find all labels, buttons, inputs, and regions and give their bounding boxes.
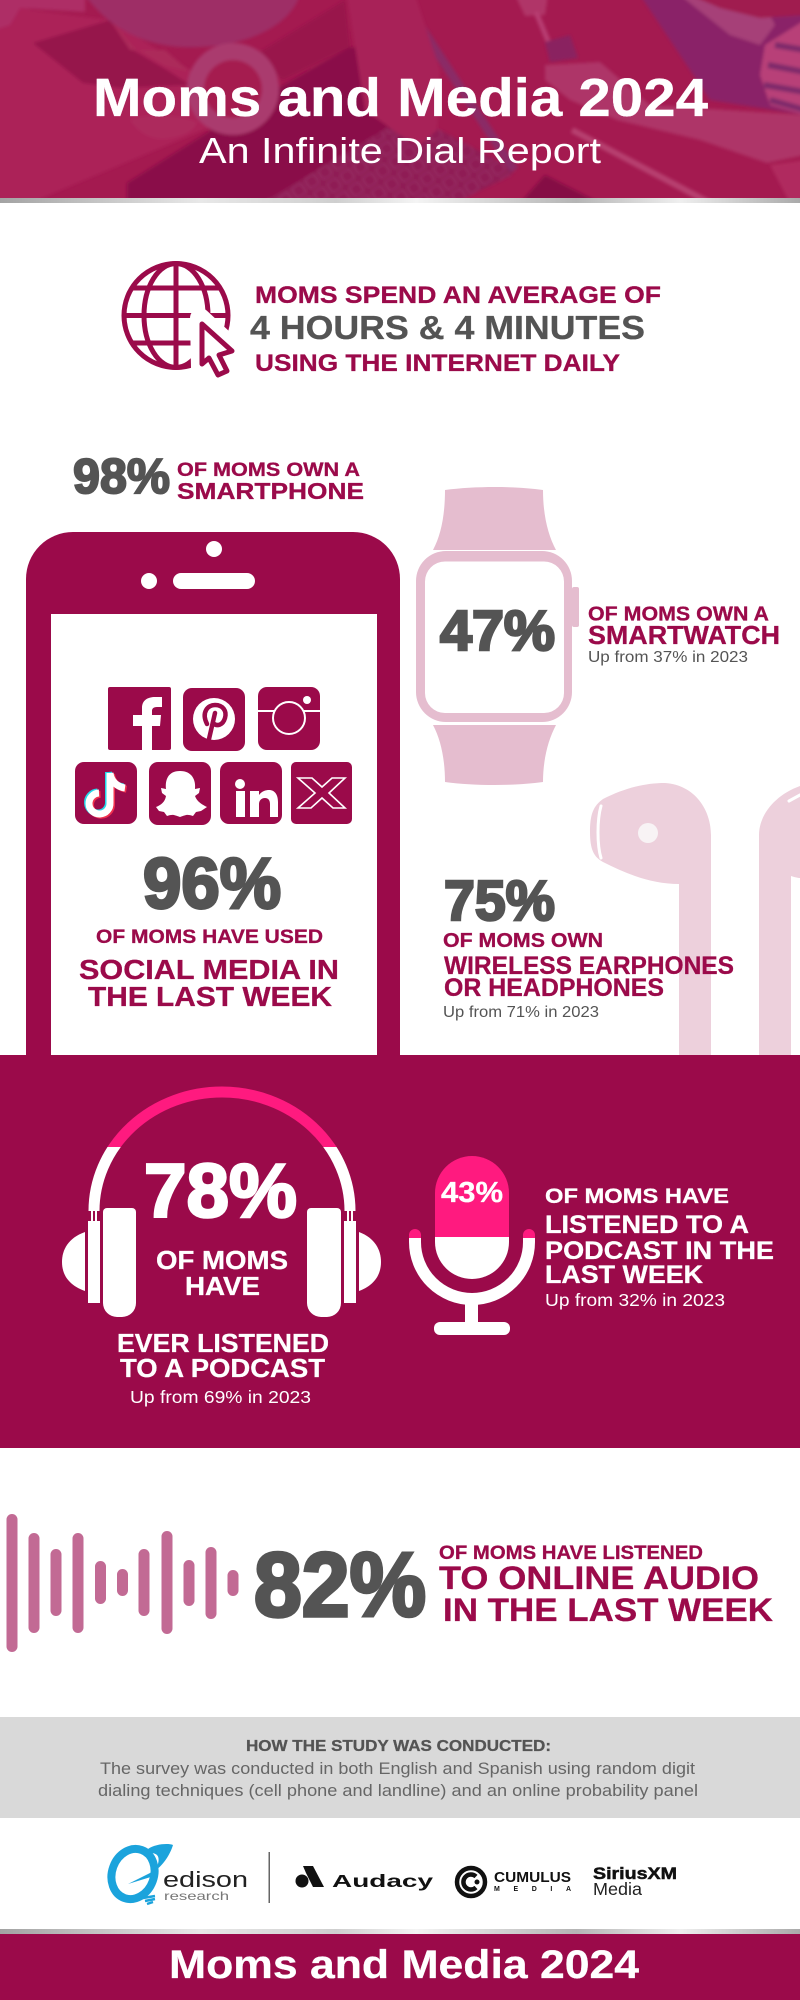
text: online audio stat xyxy=(254,1535,773,1636)
text: internet use stat xyxy=(250,282,661,377)
icon: audio waveform xyxy=(6,1514,238,1652)
header silver divider xyxy=(0,198,800,203)
text: earphones stat: 75% xyxy=(444,869,555,933)
text: online audio stat: TO ONLINE AUDIO xyxy=(439,1560,759,1596)
text: social media stat: THE LAST WEEK xyxy=(88,981,332,1012)
panel: methodology: The survey was conducted in both English and Spanish using random digit xyxy=(100,1760,695,1778)
text: last week podcast stat: LISTENED TO A xyxy=(545,1211,749,1239)
text: social media stat xyxy=(79,845,339,1012)
divider xyxy=(268,1852,270,1903)
text: smartphone stat: 98% xyxy=(73,450,170,504)
text: ever listened to a podcast stat: HAVE xyxy=(185,1271,260,1301)
text: social media stat: 96% xyxy=(143,845,281,924)
panel: footer band xyxy=(0,1934,800,2000)
icon: globe with cursor xyxy=(124,263,238,378)
logo: edison research: research xyxy=(164,1889,229,1903)
panel: methodology: dialing techniques (cell phone and landline) and an online probability panel xyxy=(98,1782,698,1800)
icon: pinterest xyxy=(183,688,245,751)
text: online audio stat: 82% xyxy=(254,1535,426,1636)
text: ever listened to a podcast stat xyxy=(117,1149,329,1407)
text: ever listened to a podcast stat: OF MOMS xyxy=(156,1245,288,1275)
text: earphones stat: WIRELESS EARPHONES xyxy=(444,952,734,980)
text: internet use stat: 4 HOURS & 4 MINUTES xyxy=(250,309,645,346)
icon: tiktok xyxy=(75,762,137,824)
text: smartphone stat: OF MOMS OWN A xyxy=(177,460,360,481)
text: smartwatch stat: SMARTWATCH xyxy=(588,620,780,650)
icon: wireless earbuds xyxy=(590,783,800,1056)
text: earphones stat: Up from 71% in 2023 xyxy=(443,1004,599,1021)
text: last week podcast stat: Up from 32% in 2023 xyxy=(545,1290,725,1310)
text: smartphone stat: SMARTPHONE xyxy=(177,478,364,504)
text: earphones stat: OR HEADPHONES xyxy=(444,974,664,1002)
panel: podcast band xyxy=(0,1055,800,1448)
text: ever listened to a podcast stat: 78% xyxy=(144,1149,297,1234)
logo: siriusxm media: Media xyxy=(593,1879,642,1899)
icon: smartwatch xyxy=(416,487,579,785)
logo: cumulus media: MEDIA xyxy=(494,1886,571,1893)
text: earphones stat xyxy=(443,869,734,1021)
text: ever listened to a podcast stat: TO A PODCAST xyxy=(120,1353,325,1383)
text: smartwatch stat xyxy=(440,599,780,666)
logo: audacy: Audacy xyxy=(332,1871,433,1891)
footer silver divider xyxy=(0,1929,800,1934)
text: last week podcast stat: OF MOMS HAVE xyxy=(545,1184,729,1208)
text: online audio stat: IN THE LAST WEEK xyxy=(443,1592,773,1628)
header banner photo xyxy=(0,0,800,203)
text: earphones stat: OF MOMS OWN xyxy=(443,930,603,952)
icon: smartphone frame xyxy=(26,532,400,1056)
icon: linkedin xyxy=(220,762,282,824)
icon: instagram xyxy=(258,687,320,750)
logo: audacy xyxy=(296,1866,433,1891)
text: internet use stat: MOMS SPEND AN AVERAGE OF xyxy=(255,282,661,309)
text: last week podcast stat xyxy=(441,1177,774,1310)
text: last week podcast stat: PODCAST IN THE xyxy=(545,1237,774,1265)
logo: edison research: edison xyxy=(163,1867,248,1892)
icon: snapchat xyxy=(149,762,211,825)
logo: edison research xyxy=(105,1843,248,1905)
text: social media stat: OF MOMS HAVE USED xyxy=(96,927,323,948)
text: last week podcast stat: 43% xyxy=(441,1177,503,1209)
logo: siriusxm media xyxy=(593,1864,677,1899)
panel: footer band: Moms and Media 2024 xyxy=(169,1943,640,1987)
title: Moms and Media 2024 xyxy=(93,68,708,128)
icon: facebook xyxy=(108,687,171,750)
icon: microphone xyxy=(415,1156,529,1335)
logo: cumulus media: CUMULUS xyxy=(494,1870,571,1886)
panel: methodology: HOW THE STUDY WAS CONDUCTED: xyxy=(246,1738,551,1755)
logo: cumulus media xyxy=(457,1868,571,1896)
text: smartwatch stat: OF MOMS OWN A xyxy=(588,604,769,626)
icon: headphones xyxy=(62,1092,381,1317)
logo: siriusxm media: SiriusXM xyxy=(593,1864,677,1883)
text: online audio stat: OF MOMS HAVE LISTENED xyxy=(439,1542,703,1564)
icon: X xyxy=(291,762,352,824)
text: ever listened to a podcast stat: EVER LISTENED xyxy=(117,1328,329,1358)
text: last week podcast stat: LAST WEEK xyxy=(545,1261,703,1289)
subtitle: An Infinite Dial Report xyxy=(199,130,601,171)
text: ever listened to a podcast stat: Up from 69% in 2023 xyxy=(130,1387,311,1407)
text: smartwatch stat: Up from 37% in 2023 xyxy=(588,649,748,666)
text: smartwatch stat: 47% xyxy=(440,599,555,663)
text: internet use stat: USING THE INTERNET DAILY xyxy=(255,350,620,377)
panel: methodology xyxy=(0,1717,800,1818)
text: smartphone stat xyxy=(73,450,364,504)
text: social media stat: SOCIAL MEDIA IN xyxy=(79,954,339,985)
